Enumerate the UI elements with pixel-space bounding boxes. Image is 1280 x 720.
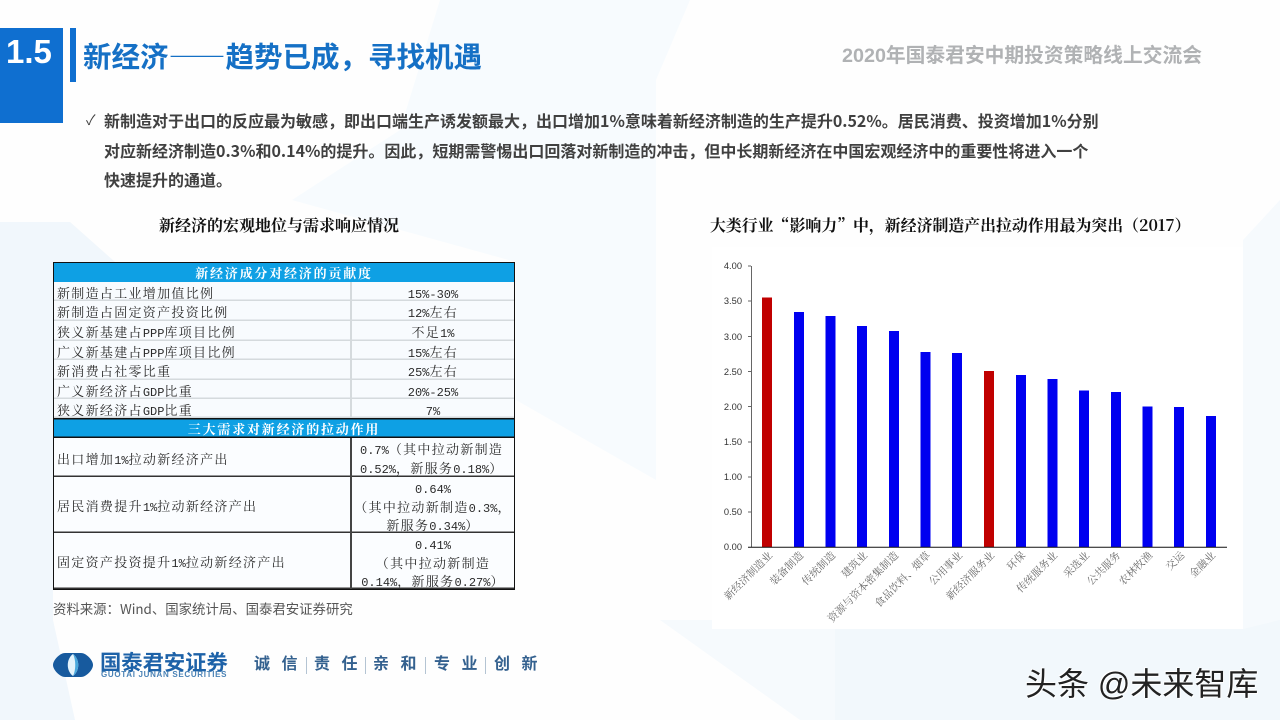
row: investment: 0.14%，新服务0.27%） xyxy=(361,571,505,590)
row: 广义新经济占GDP比重 xyxy=(57,381,193,400)
category labels: 采选业 xyxy=(1060,548,1093,581)
category labels: 装备制造 xyxy=(767,548,807,589)
row: exports: 0.7%（其中拉动新制造 xyxy=(360,439,503,458)
bars xyxy=(762,298,1216,547)
text line 3: 快速提升的通道。 xyxy=(104,167,232,191)
table header: demand pull xyxy=(53,418,515,438)
table header: contribution: 新经济成分对经济的贡献度 xyxy=(195,263,373,282)
left heading: 新经济的宏观地位与需求响应情况 xyxy=(159,213,399,236)
category labels: 建筑业 xyxy=(838,548,871,581)
title: 新经济——趋势已成，寻找机遇 xyxy=(83,35,482,76)
source note: 资料来源：Wind、国家统计局、国泰君安证券研究 xyxy=(53,598,353,618)
row: investment xyxy=(53,533,515,589)
slogan: 创新 xyxy=(494,656,549,673)
category labels: 农林牧渔 xyxy=(1116,548,1156,589)
row xyxy=(53,321,515,341)
row: investment: 固定资产投资提升1%拉动新经济产出 xyxy=(57,552,286,571)
row: 狭义新基建占PPP库项目比例 xyxy=(57,322,236,341)
y axis xyxy=(724,261,752,552)
row: consumption: 新服务0.34%） xyxy=(386,515,480,534)
bar chart panel xyxy=(712,261,1243,629)
company Chinese name: 国泰君安证券 xyxy=(100,651,228,675)
row: 狭义新经济占GDP比重 xyxy=(57,400,193,419)
y axis: 4.00 xyxy=(724,261,742,271)
row: consumption: （其中拉动新制造0.3%， xyxy=(354,496,512,516)
category labels: 环保 xyxy=(1003,548,1029,574)
y axis: 2.00 xyxy=(724,402,742,412)
check mark: ✓ xyxy=(86,112,96,128)
category labels: 传统制造 xyxy=(799,548,839,589)
category labels: 传统服务业 xyxy=(1013,548,1061,596)
slogan: 诚信 xyxy=(254,656,309,673)
row: exports: 0.52%，新服务0.18%） xyxy=(360,458,504,476)
y axis: 1.00 xyxy=(724,472,742,482)
watermark: 头条 @未来智库 xyxy=(1025,666,1258,702)
row: 新制造占工业增加值比例 xyxy=(57,283,214,302)
row xyxy=(53,282,515,301)
row: 新消费占社零比重 xyxy=(57,361,171,380)
category labels: 交运 xyxy=(1162,548,1188,574)
text line 1: 新制造对于出口的反应最为敏感，即出口端生产诱发额最大，出口增加1%意味着新经济制造的生产提升0.52%。居民消费、投资增加1%分别 xyxy=(104,108,1099,132)
table header: demand pull: 三大需求对新经济的拉动作用 xyxy=(188,419,380,438)
section number block xyxy=(0,28,63,123)
right heading: 大类行业“影响力”中，新经济制造产出拉动作用最为突出（2017） xyxy=(710,213,1191,236)
data table xyxy=(53,262,515,590)
y axis: 0.00 xyxy=(724,542,742,552)
slogan: 亲和 xyxy=(373,656,428,673)
row: 12%左右 xyxy=(408,302,458,321)
row: 15%-30% xyxy=(408,288,458,302)
category labels: 公共服务 xyxy=(1084,548,1124,589)
slogan: 专业 xyxy=(434,656,489,673)
table header: contribution xyxy=(53,262,515,282)
company logo xyxy=(53,651,228,679)
category labels: 金融业 xyxy=(1186,548,1219,581)
row: consumption: 0.64% xyxy=(415,483,451,497)
row: 不足1% xyxy=(411,322,454,341)
slogan: 责任 xyxy=(314,656,369,673)
y axis: 3.50 xyxy=(724,296,742,306)
row: 20%-25% xyxy=(408,386,458,400)
row xyxy=(53,341,515,360)
section number: 1.5 xyxy=(6,33,52,70)
category labels: 资源与资本密集制造 xyxy=(824,548,902,626)
row xyxy=(53,301,515,321)
row xyxy=(53,380,515,399)
category labels: 公用事业 xyxy=(926,548,966,589)
row xyxy=(53,399,515,418)
row: consumption xyxy=(53,477,515,533)
row: 25%左右 xyxy=(408,361,458,380)
y axis: 2.50 xyxy=(724,367,742,377)
text line 2: 对应新经济制造0.3%和0.14%的提升。因此，短期需警惕出口回落对新制造的冲击，但中长期新经济在中国宏观经济中的重要性将进入一个 xyxy=(104,138,1088,162)
category labels: 食品饮料、烟草 xyxy=(871,548,934,611)
row: consumption: 居民消费提升1%拉动新经济产出 xyxy=(57,496,257,515)
category labels: 新经济制造业 xyxy=(721,548,776,603)
row xyxy=(53,360,515,380)
y axis: 1.50 xyxy=(724,437,742,447)
category labels: 新经济服务业 xyxy=(943,548,998,603)
conference name: 2020年国泰君安中期投资策略线上交流会 xyxy=(842,45,1202,67)
row: exports: 出口增加1%拉动新经济产出 xyxy=(57,449,229,468)
row: exports xyxy=(53,438,515,477)
key takeaway text xyxy=(86,108,1099,191)
row: 新制造占固定资产投资比例 xyxy=(57,302,229,321)
row: investment: （其中拉动新制造 xyxy=(376,552,490,572)
row: 7% xyxy=(426,405,440,419)
slogan xyxy=(254,655,549,674)
row: investment: 0.41% xyxy=(415,539,451,553)
icon: lens emblem xyxy=(53,653,93,677)
company English name: GUOTAI JUNAN SECURITIES xyxy=(101,670,227,679)
title accent bar xyxy=(70,28,76,82)
row: 广义新基建占PPP库项目比例 xyxy=(57,342,236,361)
row: 15%左右 xyxy=(408,342,458,361)
y axis: 3.00 xyxy=(724,332,742,342)
category labels xyxy=(721,548,1219,626)
y axis: 0.50 xyxy=(724,507,742,517)
